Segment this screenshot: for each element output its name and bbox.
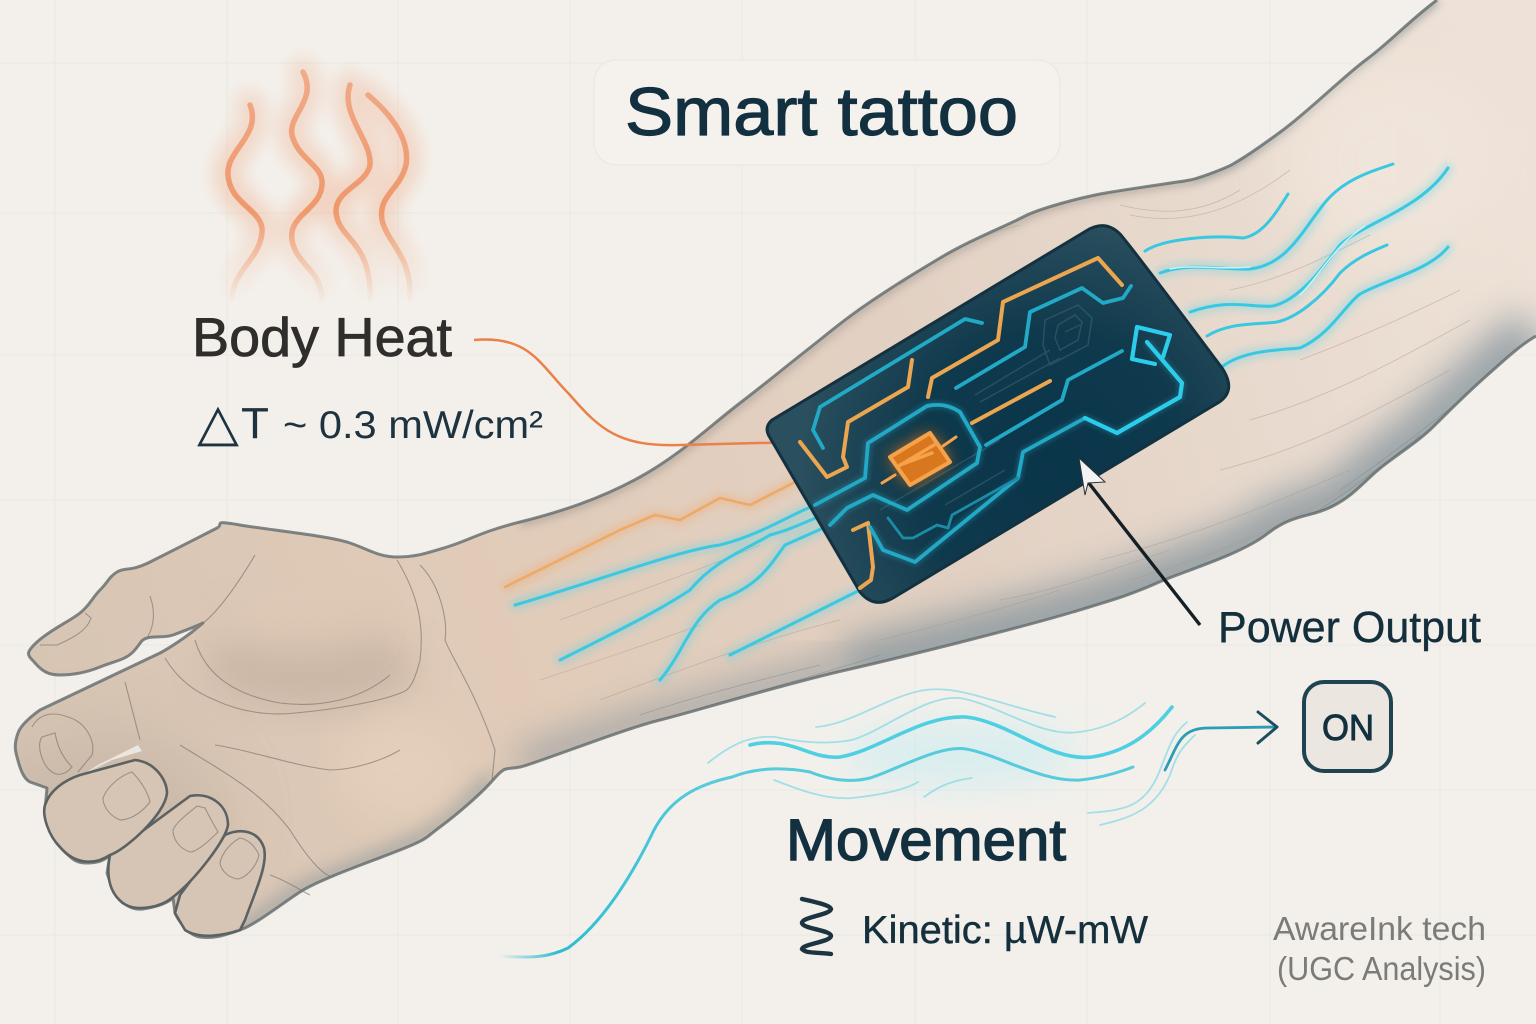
power output label: Power Output: [1218, 603, 1481, 652]
orange traces: [800, 258, 1122, 588]
wave glow: [840, 721, 1080, 789]
main wave: [750, 707, 1172, 757]
body heat value: T: [241, 399, 269, 448]
pointer arrow: [1079, 458, 1200, 625]
movement waves: [498, 689, 1195, 957]
chip glow: [890, 433, 950, 485]
cyan upper arm waves: [1145, 164, 1448, 366]
fingers: [44, 760, 265, 936]
skin texture: [540, 170, 1470, 700]
arrow to on button: [1165, 712, 1277, 770]
palm and finger lines: [32, 555, 495, 895]
forearm energy traces: [505, 164, 1448, 680]
body heat connector line: [474, 339, 800, 445]
circuit traces: [800, 258, 1182, 588]
cyan forearm traces: [515, 505, 860, 680]
movement heading: Movement: [786, 808, 1066, 873]
on button: [1304, 682, 1391, 771]
cyan traces: [813, 286, 1131, 562]
body heat value: △: [197, 393, 239, 453]
kinetic value: Kinetic: µW-mW: [862, 909, 1148, 952]
body heat value: [197, 393, 543, 453]
body heat value: ~ 0.3 mW/cm²: [283, 404, 543, 447]
thenar shade: [214, 632, 414, 712]
source credit: AwareInk tech: [1273, 910, 1486, 947]
source credit: (UGC Analysis): [1277, 950, 1486, 987]
body heat heading: Body Heat: [192, 306, 452, 368]
finger gap: [82, 745, 142, 775]
smart tattoo patch: [767, 226, 1229, 602]
icon: spring: [802, 899, 831, 954]
orange forearm trace: [505, 482, 795, 587]
faint etched circuit: [880, 305, 1092, 510]
long movement wave: [498, 749, 1133, 957]
title panel: [594, 60, 1060, 165]
icon: body heat waves: [228, 72, 410, 300]
title: Smart tattoo: [625, 74, 1018, 150]
cyan glow: [815, 342, 1182, 562]
source credit: [1273, 910, 1486, 987]
chip: [882, 433, 956, 485]
on button: ON: [1322, 707, 1374, 748]
faint waves: [708, 689, 1195, 825]
